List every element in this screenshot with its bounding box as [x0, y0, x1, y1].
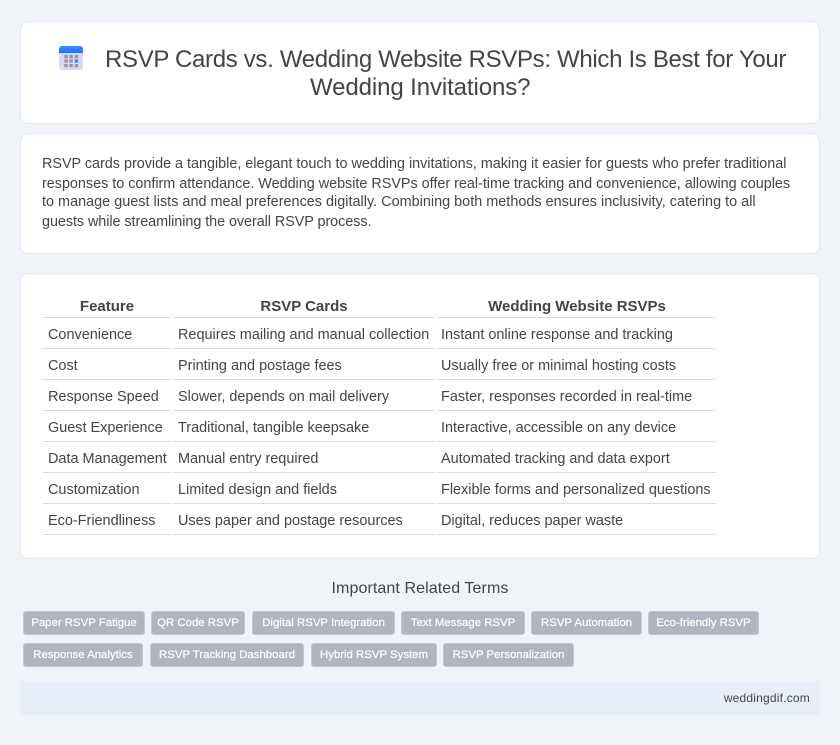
related term chips: RSVP Personalization: [453, 649, 564, 661]
text block: description: RSVP cards provide a tangible, elegant touch to wedding invitations, making it easier for guests who prefer traditional: [42, 156, 786, 172]
row: eco-friendliness: Digital, reduces paper waste: [441, 513, 623, 529]
row: eco-friendliness: Eco-Friendliness: [48, 513, 156, 529]
row: guest experience: [48, 420, 676, 436]
table header: Wedding Website RSVPs: [488, 298, 666, 315]
related term chips: RSVP Automation: [541, 617, 632, 629]
row: eco-friendliness: [48, 513, 623, 529]
related term chips: RSVP Tracking Dashboard: [159, 649, 295, 661]
table header: Feature: [80, 298, 134, 315]
row: guest experience: Traditional, tangible keepsake: [178, 420, 369, 436]
text block: description: [42, 156, 790, 230]
text block: description: responses to confirm attendance. Wedding website RSVPs offer real-time tracking and convenience, allowing couples: [42, 176, 790, 192]
row: convenience: Convenience: [48, 327, 132, 343]
related term chips: QR Code RSVP: [157, 617, 239, 629]
related term chips: Hybrid RSVP System: [320, 649, 428, 661]
title: Wedding Invitations?: [310, 74, 530, 101]
related term chips: [23, 611, 759, 667]
row: response speed: Response Speed: [48, 389, 159, 405]
text block: description: guests while streamlining the overall RSVP process.: [42, 214, 371, 230]
table header: [80, 298, 666, 315]
related term chips: Eco-friendly RSVP: [656, 617, 751, 629]
row: customization: Customization: [48, 482, 139, 498]
row: guest experience: Interactive, accessible on any device: [441, 420, 676, 436]
row: convenience: Requires mailing and manual collection: [178, 327, 429, 343]
related term chips: Digital RSVP Integration: [262, 617, 385, 629]
row: cost: Usually free or minimal hosting costs: [441, 358, 676, 374]
footer text: site name: weddingdif.com: [724, 691, 810, 705]
row: response speed: Faster, responses recorded in real-time: [441, 389, 692, 405]
row: customization: Flexible forms and personalized questions: [441, 482, 711, 498]
row: customization: Limited design and fields: [178, 482, 337, 498]
related term chips: Text Message RSVP: [411, 617, 515, 629]
row: data management: Data Management: [48, 451, 167, 467]
table header: RSVP Cards: [260, 298, 348, 315]
title: [105, 46, 786, 101]
title: RSVP Cards vs. Wedding Website RSVPs: Which Is Best for Your: [105, 46, 786, 73]
comparison table: [43, 298, 716, 535]
row: cost: Printing and postage fees: [178, 358, 342, 374]
row: cost: [48, 358, 676, 374]
panel: description: [20, 133, 820, 254]
related term chips: Paper RSVP Fatigue: [31, 617, 137, 629]
text block: description: to manage guest lists and meal preferences digitally. Combining both methods ensures inclusivity, catering to all: [42, 194, 756, 210]
row: response speed: [48, 389, 692, 405]
row: convenience: [48, 327, 673, 343]
row: cost: Cost: [48, 358, 78, 374]
footer: [20, 681, 820, 715]
related term chips: Response Analytics: [33, 649, 133, 661]
panel: title card: [20, 21, 820, 124]
heading: related terms: Important Related Terms: [332, 580, 508, 597]
row: customization: [48, 482, 711, 498]
panel: comparison table: [20, 273, 820, 559]
row: data management: Automated tracking and data export: [441, 451, 670, 467]
row: response speed: Slower, depends on mail delivery: [178, 389, 389, 405]
row: data management: Manual entry required: [178, 451, 318, 467]
icon: calendar: [59, 46, 83, 70]
row: data management: [48, 451, 670, 467]
row: guest experience: Guest Experience: [48, 420, 163, 436]
row: eco-friendliness: Uses paper and postage resources: [178, 513, 403, 529]
row: convenience: Instant online response and tracking: [441, 327, 673, 343]
